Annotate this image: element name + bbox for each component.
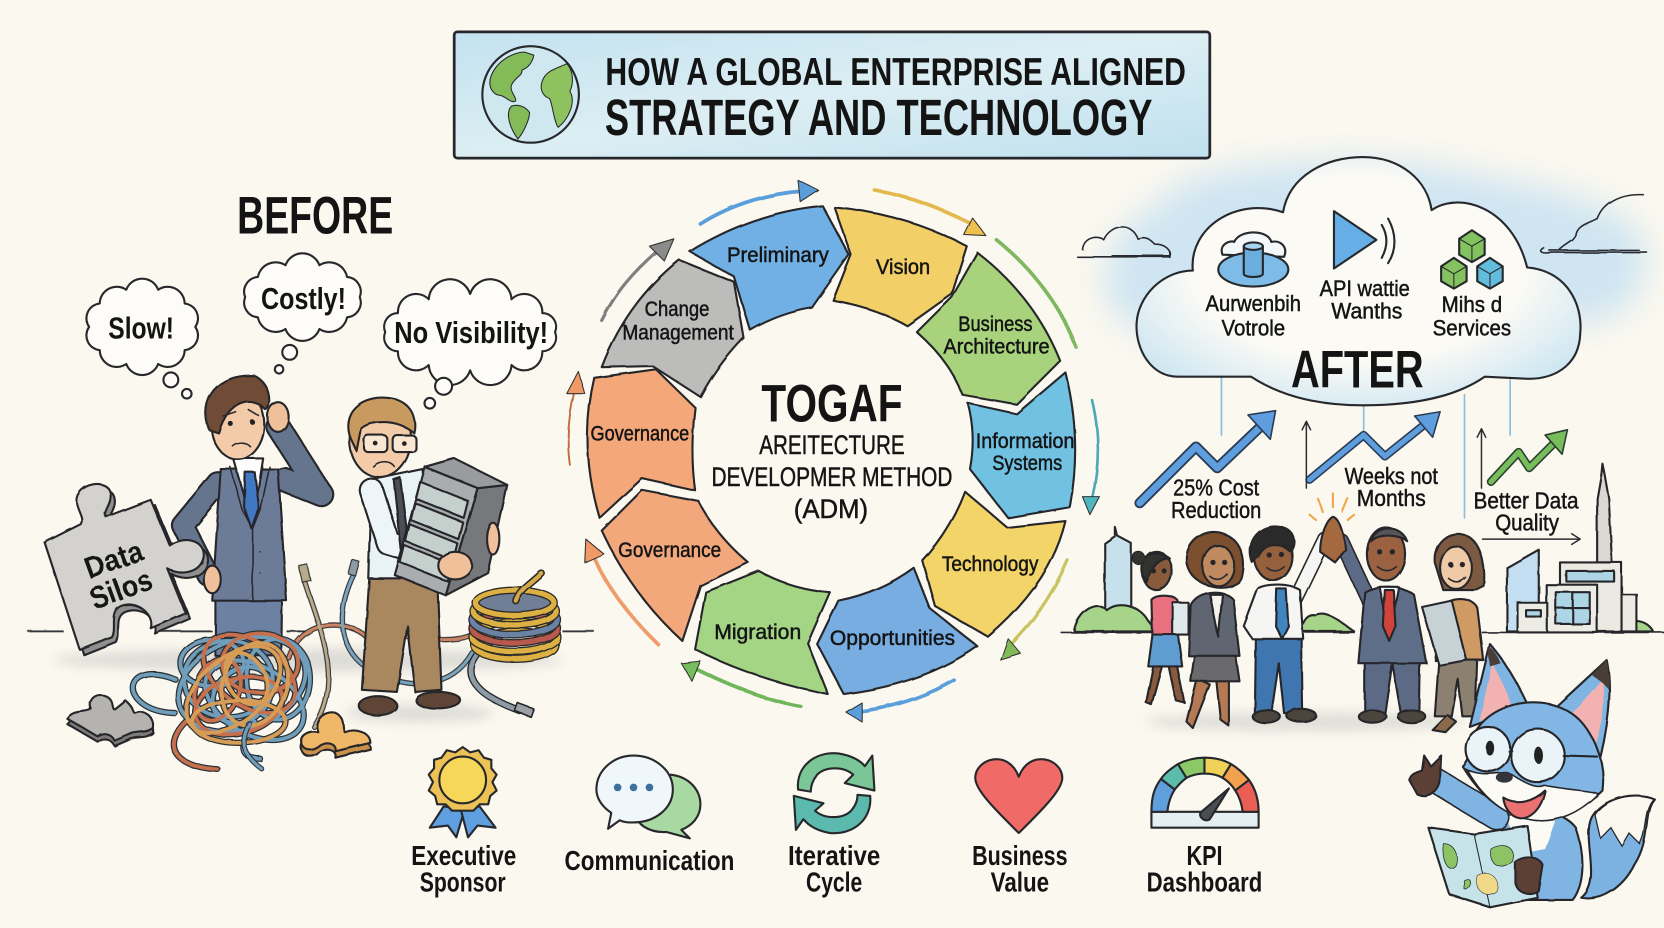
tail <box>1581 796 1654 898</box>
factor: communication <box>565 756 734 876</box>
icon: API signal <box>1334 211 1394 268</box>
before scene illustration <box>28 376 594 769</box>
outcome labels: Quality <box>1495 510 1559 536</box>
cloud service labels <box>1206 276 1511 340</box>
segment labels: Systems <box>992 452 1062 475</box>
segment labels: Information <box>976 430 1074 453</box>
factor: executive sponsor: Sponsor <box>420 866 506 897</box>
puzzle piece: small orange <box>301 713 370 758</box>
factor: business value: Value <box>991 866 1049 897</box>
ground <box>28 631 594 722</box>
segment labels: Management <box>622 322 734 345</box>
wheel center text: TOGAF <box>761 374 903 433</box>
wheel segments <box>587 206 1075 694</box>
puzzle piece: small grey <box>67 695 153 746</box>
glasses <box>1466 727 1597 782</box>
factor: business value <box>972 759 1068 897</box>
outcome labels: Reduction <box>1171 497 1261 523</box>
tower left <box>1105 527 1131 632</box>
icon: service cubes <box>1441 230 1503 289</box>
outcome arrows <box>1140 411 1580 544</box>
segment labels: Migration <box>714 621 801 644</box>
factor: executive sponsor <box>411 747 516 897</box>
icon: globe <box>482 46 579 143</box>
cloud service labels: Votrole <box>1221 315 1285 340</box>
wheel center text <box>712 374 952 524</box>
arm and paw <box>1435 780 1496 817</box>
person: man in grey suit <box>1341 527 1426 723</box>
man holding server <box>348 398 507 715</box>
factor: iterative cycle: Cycle <box>806 866 862 897</box>
cable coil <box>471 573 557 717</box>
title text: STRATEGY AND TECHNOLOGY <box>605 89 1153 146</box>
fox mascot <box>1409 644 1654 907</box>
map <box>1428 826 1538 907</box>
wheel direction arrows <box>567 180 1099 722</box>
paw on map <box>1515 857 1543 894</box>
skyline and ground <box>1061 464 1664 632</box>
segment labels: Change <box>645 298 709 321</box>
thought bubble: slow: Slow! <box>108 311 174 346</box>
head <box>1462 702 1603 817</box>
outcome labels: Better Data <box>1474 487 1579 513</box>
segment labels: Vision <box>876 256 930 279</box>
factor: executive sponsor: Executive <box>411 840 516 871</box>
team celebrating <box>1132 493 1484 732</box>
bottom icons row <box>411 747 1262 897</box>
wheel center text: AREITECTURE <box>759 430 905 460</box>
small sky clouds <box>1077 194 1647 257</box>
title panel <box>454 32 1210 158</box>
thought bubble: costly: Costly! <box>261 281 346 316</box>
factor: KPI dashboard: KPI <box>1186 840 1223 871</box>
outcome labels: Weeks not <box>1345 463 1438 489</box>
after heading: AFTER <box>1291 340 1424 399</box>
person: man in white shirt <box>1244 526 1324 723</box>
puzzle piece: data silos: Data <box>80 532 148 586</box>
puzzle piece: data silos: Silos <box>85 562 157 616</box>
after cloud <box>1137 157 1581 405</box>
icon: server tower <box>395 458 507 595</box>
thin arrows <box>1302 421 1580 544</box>
segment labels: Opportunities <box>830 627 955 650</box>
cables behind figures <box>289 560 472 727</box>
puzzle piece: data silos <box>45 484 208 655</box>
segment labels: Technology <box>942 553 1039 576</box>
cloud outline <box>1137 157 1581 405</box>
ears <box>1470 644 1528 727</box>
segment labels: Architecture <box>943 335 1050 358</box>
title banner <box>454 32 1210 158</box>
watercolor sky wash <box>1104 161 1645 340</box>
arrow: speed trend <box>1310 412 1440 480</box>
segment labels: Business <box>958 313 1033 336</box>
factor: KPI dashboard: Dashboard <box>1147 866 1262 897</box>
bushes <box>1074 605 1653 631</box>
segment labels <box>591 244 1074 650</box>
wheel center text: (ADM) <box>794 494 868 524</box>
cloud service labels: Wanths <box>1331 298 1402 323</box>
outcome labels <box>1171 463 1579 536</box>
arrow: cost trend <box>1140 411 1276 503</box>
person: woman with clipboard <box>1422 534 1484 732</box>
cloud service labels: Services <box>1433 315 1511 340</box>
thought bubble: slow <box>86 279 198 398</box>
person: woman with blazer <box>1186 532 1243 728</box>
factor: iterative cycle: Iterative <box>788 840 880 871</box>
title text: HOW A GLOBAL ENTERPRISE ALIGNED <box>605 50 1186 94</box>
thought bubble: no visibility <box>384 279 556 409</box>
person: girl <box>1132 552 1189 705</box>
outcome labels: 25% Cost <box>1173 475 1260 501</box>
wheel center text: DEVELOPMER METHOD <box>712 462 952 492</box>
segment labels: Governance <box>591 422 689 445</box>
factor: KPI dashboard <box>1147 758 1262 897</box>
arrow: quality trend <box>1491 430 1567 482</box>
connector lines from cloud <box>1221 377 1510 518</box>
thought bubble: no visibility: No Visibility! <box>394 315 548 350</box>
factory and tower right <box>1507 464 1636 632</box>
title text <box>605 50 1186 146</box>
high five hands and sparks <box>1310 493 1354 562</box>
thought bubble: costly <box>244 253 361 374</box>
segment labels: Governance <box>618 539 721 562</box>
nose and mouth <box>1496 773 1513 783</box>
tangled cable pile <box>133 619 319 769</box>
icon: database on platform <box>1218 232 1288 287</box>
factor: business value: Business <box>972 840 1068 871</box>
factor: communication: Communication <box>565 845 734 876</box>
man in suit <box>183 376 322 656</box>
before heading: BEFORE <box>237 186 393 245</box>
segment labels: Preliminary <box>727 244 829 267</box>
cloud service labels: API wattie <box>1320 276 1410 301</box>
outcome labels: Months <box>1357 485 1426 511</box>
cloud service labels: Aurwenbih <box>1206 291 1301 316</box>
TOGAF ADM wheel <box>567 180 1099 722</box>
body <box>1498 811 1582 900</box>
suit man hip hand <box>204 566 221 593</box>
cloud service labels: Mihs d <box>1442 292 1502 317</box>
factor: iterative cycle <box>788 753 880 897</box>
